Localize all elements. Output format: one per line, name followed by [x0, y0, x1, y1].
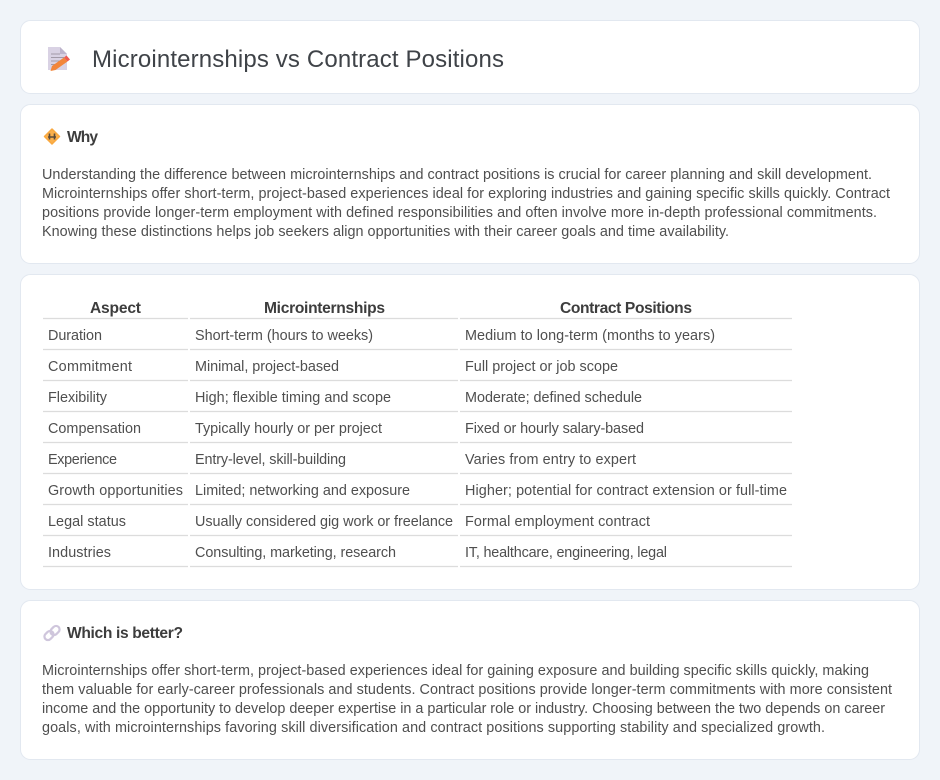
icon: chain link — [43, 624, 61, 642]
table row: growth opportunities: Higher; potential for contract extension or full-time — [465, 483, 787, 499]
text block: which is better explanation: goals, with microinternships favoring skill diversification and contract positions supporting stability and specialized growth. — [42, 720, 825, 736]
table row: legal status — [43, 514, 792, 536]
table row: compensation: Compensation — [48, 421, 141, 437]
table header row: Contract Positions — [560, 300, 692, 317]
table header row: Microinternships — [264, 300, 385, 317]
table row: commitment: Commitment — [48, 359, 132, 375]
table row: duration: Short-term (hours to weeks) — [195, 328, 373, 344]
panel: why — [20, 104, 920, 264]
icon: document with pencil — [48, 47, 70, 71]
table row: duration: Medium to long-term (months to years) — [465, 328, 715, 344]
icon: diamond sign — [44, 129, 60, 144]
table row: growth opportunities — [43, 483, 792, 504]
table row: duration — [43, 328, 792, 350]
table row: duration: Duration — [48, 328, 102, 344]
text block: why explanation: Understanding the difference between microinternships and contract positions is crucial for career planning and skill development. — [42, 167, 872, 183]
table row: growth opportunities: Limited; networking and exposure — [195, 483, 410, 499]
table row: commitment: Minimal, project-based — [195, 359, 339, 375]
heading: which is better: Which is better? — [67, 625, 183, 642]
text block: why explanation — [42, 167, 890, 240]
page header panel — [20, 20, 920, 94]
panel: comparison table — [20, 274, 920, 590]
table row: experience: Entry-level, skill-building — [195, 452, 346, 468]
text block: why explanation: positions provide longer-term employment with defined responsibilities and often involve more in-depth professional commitments. — [42, 205, 877, 221]
table row: flexibility: Moderate; defined schedule — [465, 390, 642, 406]
panel: which is better — [20, 600, 920, 760]
table header row: Aspect — [90, 300, 141, 317]
text block: which is better explanation: income and the opportunity to develop deeper expertise in a particular role or industry. Choosing between the two depends on career — [42, 701, 885, 717]
text block: which is better explanation: them valuable for early-career professionals and students. Contract positions provide longer-term commitments with more consistent — [42, 682, 892, 698]
table header row — [43, 300, 792, 318]
table row: legal status: Formal employment contract — [465, 514, 650, 530]
heading: why: Why — [67, 129, 98, 146]
table row: legal status: Usually considered gig work or freelance — [195, 514, 453, 530]
table row: compensation — [43, 421, 792, 442]
table row: commitment — [43, 359, 792, 380]
table row: flexibility: High; flexible timing and scope — [195, 390, 391, 406]
table row: experience: Experience — [48, 452, 117, 468]
text block: why explanation: Knowing these distinctions helps job seekers align opportunities with their career goals and time availability. — [42, 224, 729, 240]
text block: why explanation: Microinternships offer short-term, project-based experiences ideal for exploring industries and gaining specific skills quickly. Contract — [42, 186, 890, 202]
table row: commitment: Full project or job scope — [465, 359, 618, 375]
text block: which is better explanation: Microinternships offer short-term, project-based experiences ideal for gaining exposure and building specific skills quickly, making — [42, 663, 869, 679]
table row: flexibility — [43, 390, 792, 412]
table row: compensation: Fixed or hourly salary-based — [465, 421, 644, 437]
table row: experience — [43, 452, 792, 474]
table row: compensation: Typically hourly or per project — [195, 421, 382, 437]
table row: industries: IT, healthcare, engineering, legal — [465, 545, 667, 561]
text block: which is better explanation — [42, 663, 892, 736]
table row: flexibility: Flexibility — [48, 390, 108, 406]
table row: industries: Industries — [48, 545, 111, 561]
table row: industries: Consulting, marketing, research — [195, 545, 396, 561]
table row: growth opportunities: Growth opportunities — [48, 483, 183, 499]
title: Microinternships vs Contract Positions — [92, 46, 504, 73]
table row: experience: Varies from entry to expert — [465, 452, 636, 468]
table row: industries — [43, 545, 792, 566]
table row: legal status: Legal status — [48, 514, 126, 530]
